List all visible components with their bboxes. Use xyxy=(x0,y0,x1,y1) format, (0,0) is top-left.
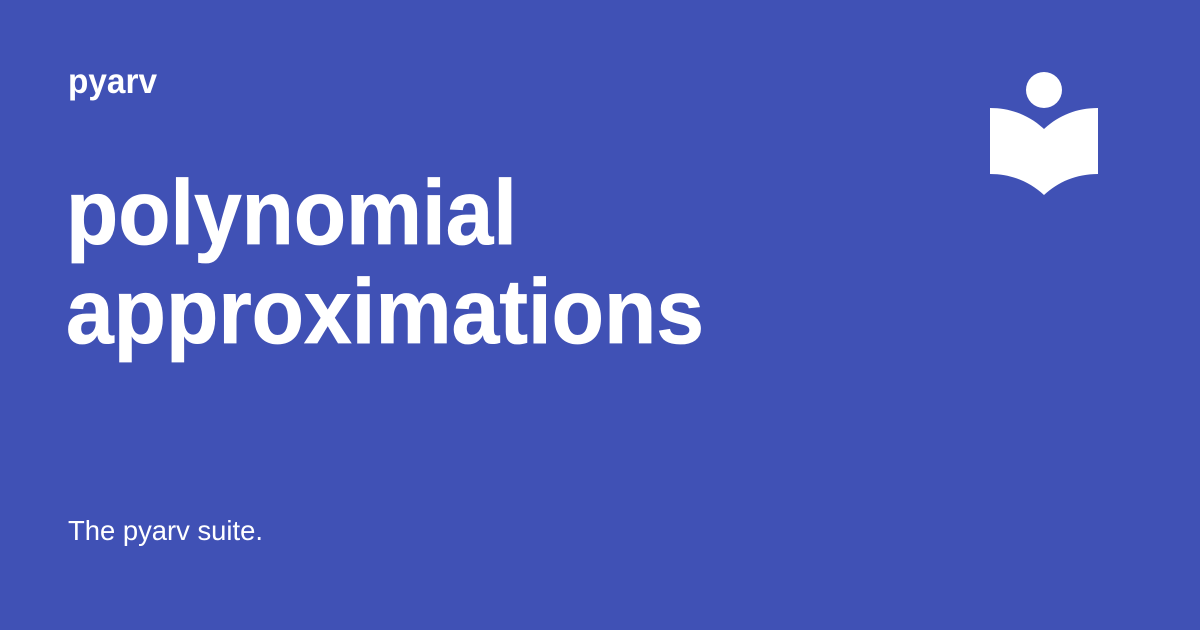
title: polynomial xyxy=(66,162,517,264)
icon: reader with open book xyxy=(990,72,1098,195)
description: The pyarv suite. xyxy=(68,515,263,546)
title: approximations xyxy=(66,261,704,363)
title xyxy=(66,162,704,363)
site name: pyarv xyxy=(68,62,157,101)
